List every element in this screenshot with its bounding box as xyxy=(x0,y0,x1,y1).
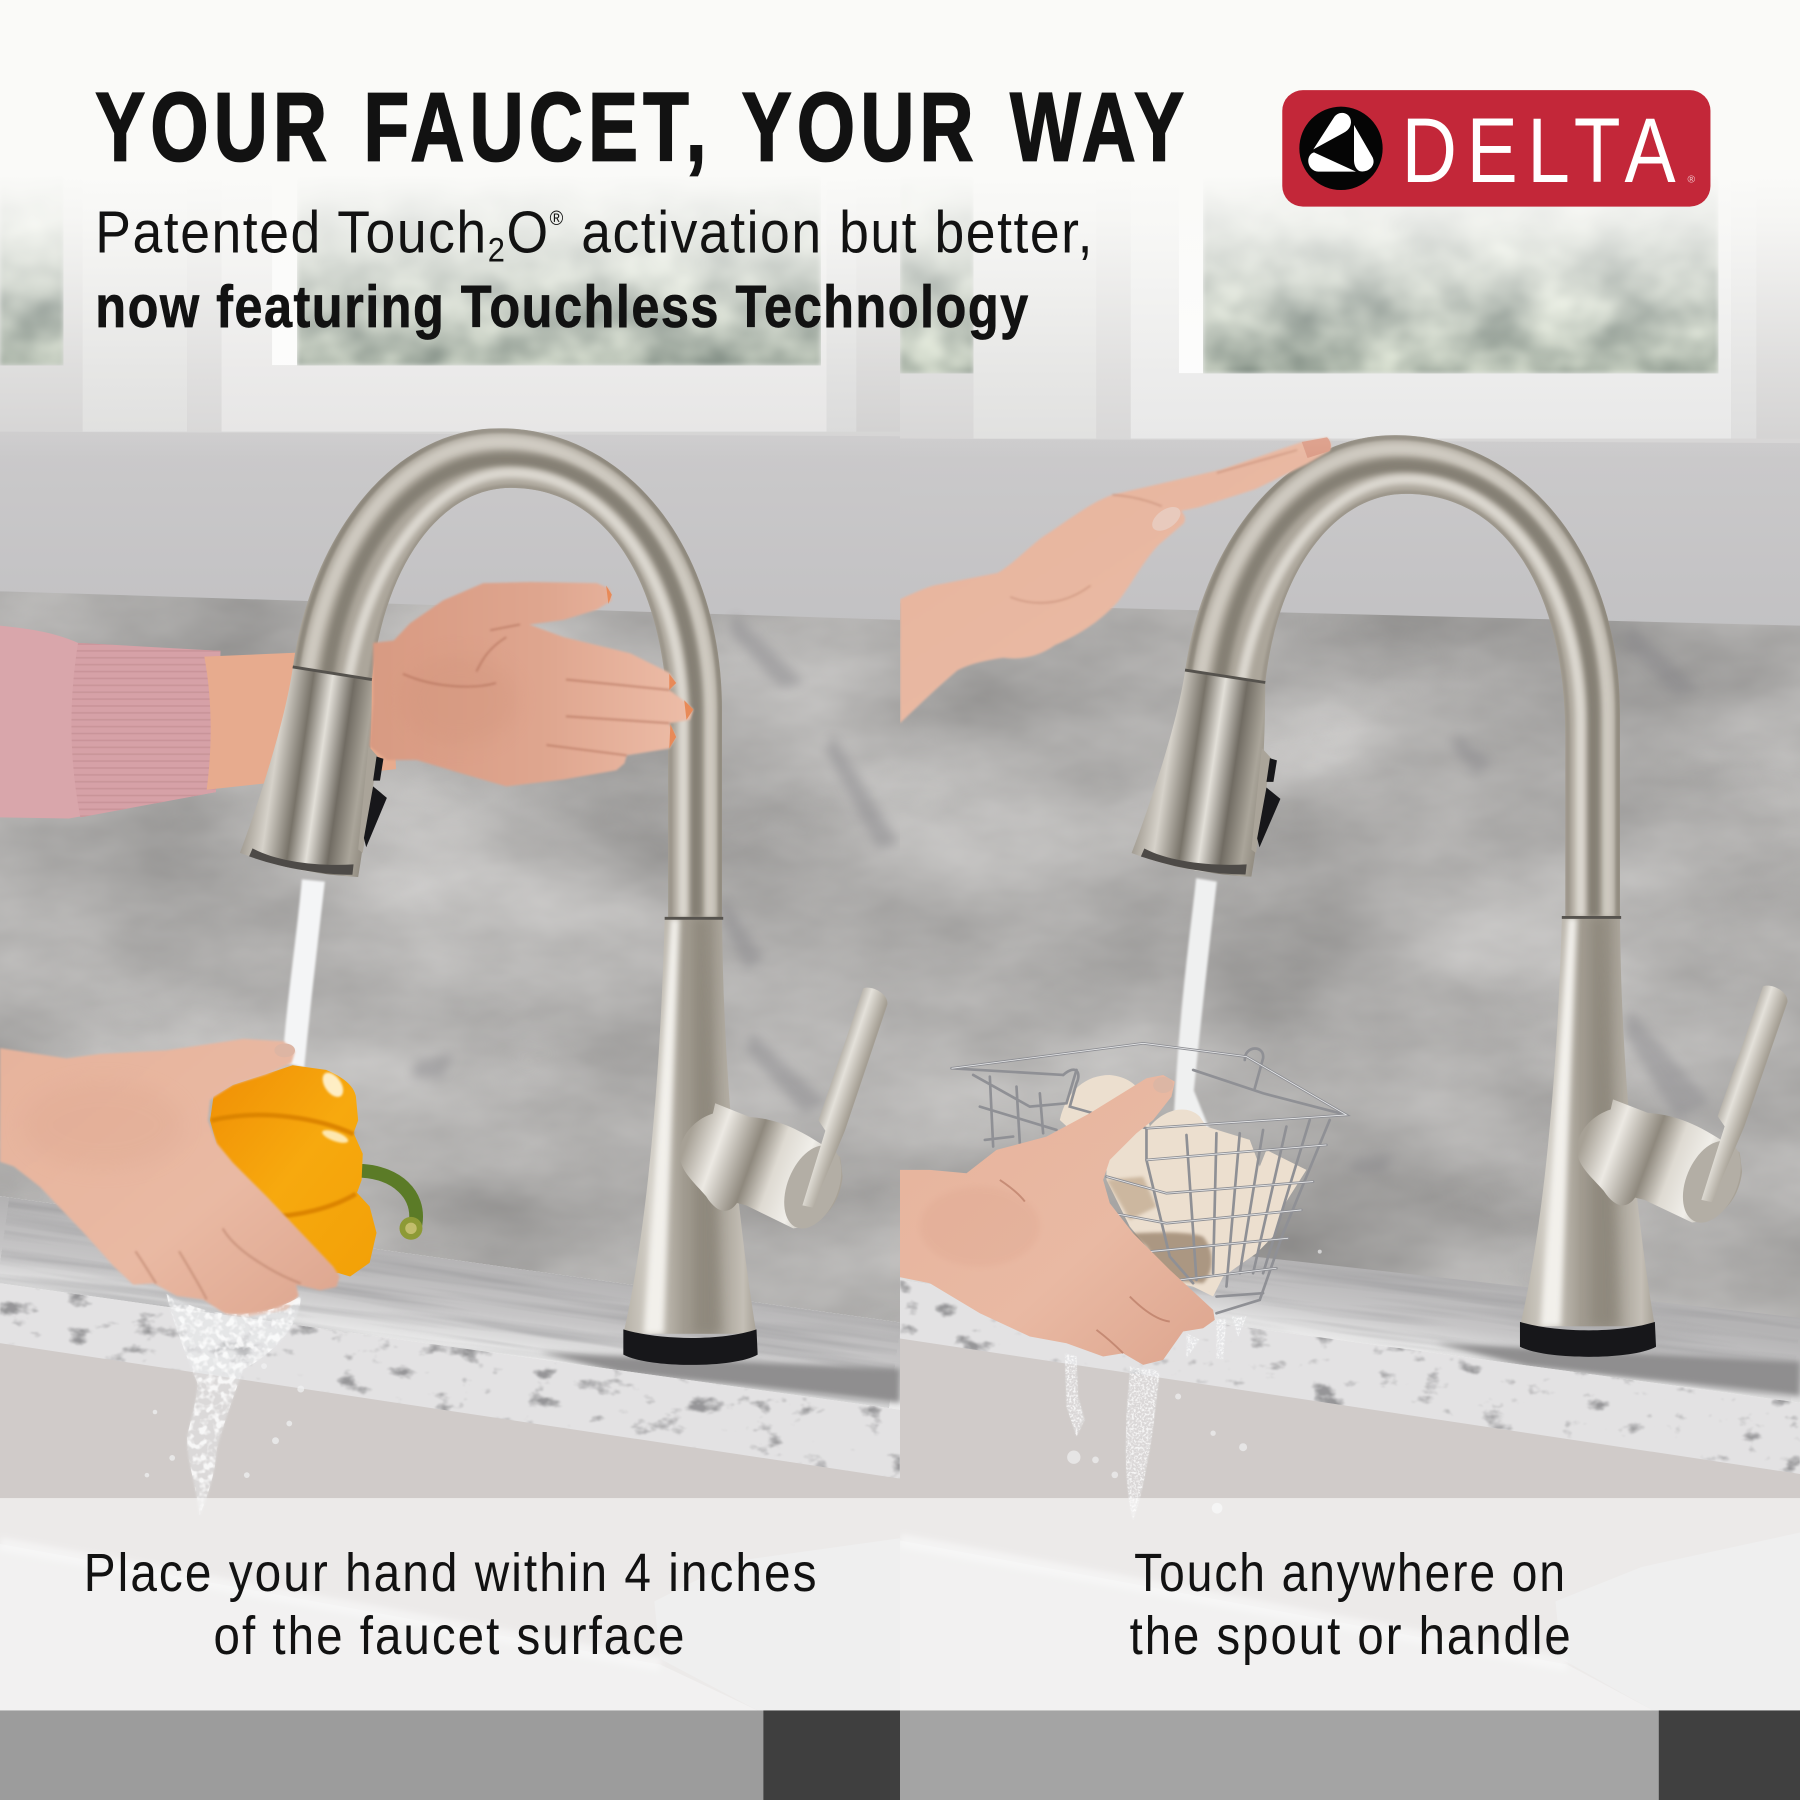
caption left line 1: Place your hand within 4 inches xyxy=(84,1543,818,1603)
window wall background xyxy=(900,196,1800,444)
hand touching spout xyxy=(900,437,1331,723)
caption left xyxy=(84,1543,818,1666)
counter top surface xyxy=(0,1196,900,1410)
sink edge xyxy=(900,1533,1800,1710)
lower wall xyxy=(900,1336,1800,1722)
marble backsplash xyxy=(0,585,900,1332)
window wall background xyxy=(0,194,900,436)
caption right line 2: the spout or handle xyxy=(1130,1606,1573,1666)
open hand xyxy=(370,582,693,786)
marble backsplash xyxy=(900,597,1800,1332)
marble veins xyxy=(1349,626,1710,1173)
water splash xyxy=(1065,1250,1322,1520)
caption band xyxy=(0,1498,1800,1710)
pepper stem xyxy=(363,1171,416,1224)
countertop xyxy=(900,1245,1800,1474)
logo wordmark: DELTA xyxy=(1402,100,1685,202)
sleeve xyxy=(0,626,220,818)
faucet left xyxy=(235,419,887,1365)
counter top surface xyxy=(900,1245,1800,1402)
counter front edge xyxy=(0,1283,900,1481)
logo mark xyxy=(1299,107,1383,190)
wire basket with mushrooms xyxy=(952,1043,1346,1313)
forearm xyxy=(204,649,396,790)
countertop xyxy=(0,1196,900,1478)
lower wall xyxy=(0,1341,900,1722)
upper wall xyxy=(900,439,1800,631)
hand holding pepper xyxy=(0,1039,340,1317)
water stream xyxy=(1173,878,1217,1148)
hand holding basket xyxy=(897,1075,1215,1365)
caption left line 2: of the faucet surface xyxy=(214,1606,686,1666)
wire mesh xyxy=(952,1043,1346,1313)
subtitle line 2: now featuring Touchless Technology xyxy=(95,273,1030,340)
yellow pepper xyxy=(210,1065,422,1277)
faucet right xyxy=(1127,426,1787,1357)
upper wall xyxy=(0,432,900,626)
mushrooms xyxy=(1060,1075,1306,1297)
subtitle line 1: O xyxy=(506,199,550,266)
caption right xyxy=(1130,1543,1573,1666)
sink edge xyxy=(0,1542,664,1674)
title: YOUR FAUCET, YOUR WAY xyxy=(95,73,1189,182)
counter front edge xyxy=(900,1280,1800,1477)
panel: right photo xyxy=(890,172,1800,1722)
subtitle line 1: activation but better, xyxy=(565,199,1094,266)
water splash xyxy=(145,1294,304,1515)
caption right line 1: Touch anywhere on xyxy=(1134,1543,1567,1603)
pepper flesh xyxy=(210,1065,377,1277)
panel: left photo xyxy=(0,172,910,1722)
marble veins xyxy=(411,614,899,1114)
Delta logo xyxy=(1282,90,1710,207)
top white fade xyxy=(0,0,1800,459)
bottom strip xyxy=(0,1710,1800,1800)
water stream xyxy=(282,879,325,1068)
subtitle line 1: Patented Touch xyxy=(95,199,533,266)
subtitle line 1: ® xyxy=(550,207,565,230)
registered mark: ® xyxy=(1688,175,1696,186)
subtitle line 1: 2 xyxy=(488,232,506,270)
logo background xyxy=(1282,90,1710,207)
